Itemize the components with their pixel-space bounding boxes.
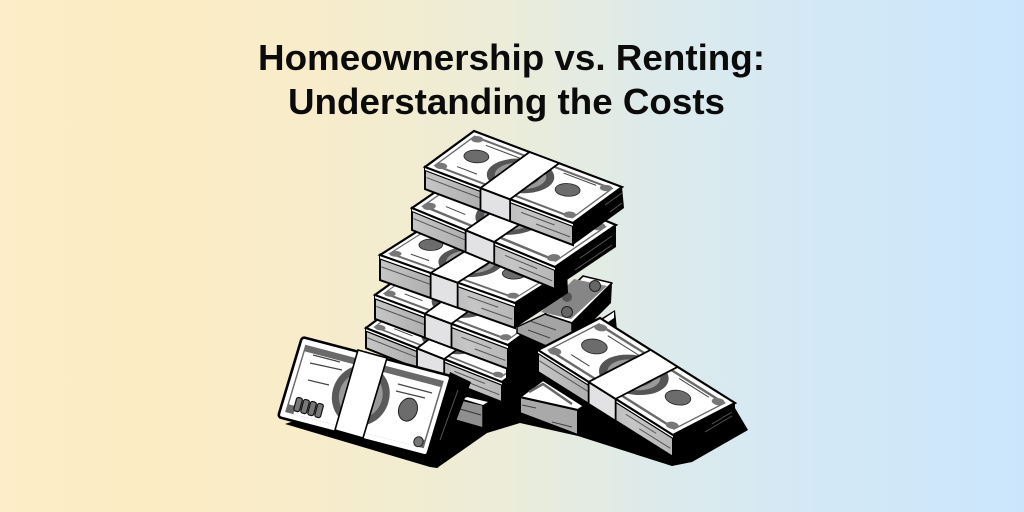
title: Understanding the Costs (288, 81, 725, 122)
illustration: pile of cash stacks (278, 131, 748, 468)
title (258, 37, 765, 122)
title: Homeownership vs. Renting: (258, 37, 765, 78)
stack 1: top of pile (425, 131, 624, 245)
stack 4 (372, 284, 526, 370)
stack 5 (364, 320, 506, 401)
low stack lying at right of pile (520, 380, 584, 435)
stack lying at right (538, 318, 735, 458)
stack 2 (412, 166, 616, 289)
ground shadow (285, 318, 748, 468)
small stack at base of pile (455, 397, 488, 428)
stack 3 (380, 222, 568, 328)
front bill leaning on pile (278, 337, 471, 468)
bill serial pills (293, 397, 324, 418)
stack behind, right of pile (517, 276, 617, 352)
